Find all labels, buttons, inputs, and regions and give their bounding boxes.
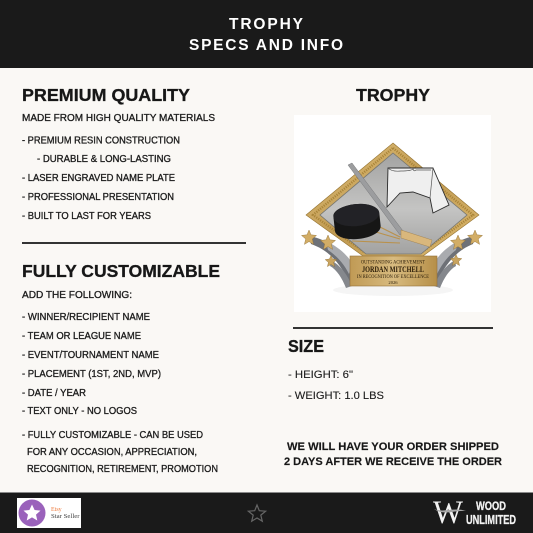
header title: TROPHY	[229, 16, 304, 33]
quality feature list	[22, 136, 180, 222]
heading: fully customizable: FULLY CUSTOMIZABLE	[22, 261, 220, 281]
shipping notice: 2 DAYS AFTER WE RECEIVE THE ORDER	[284, 456, 502, 468]
trophy base shadow	[333, 284, 453, 296]
icon: purple seal	[18, 500, 46, 526]
star seller badge: Star Seller	[51, 514, 80, 520]
shipping notice: WE WILL HAVE YOUR ORDER SHIPPED	[287, 441, 499, 453]
hockey stick	[348, 163, 432, 247]
header title: SPECS AND INFO	[189, 37, 343, 54]
logo wordmark	[466, 499, 516, 527]
customization note: FOR ANY OCCASION, APPRECIATION,	[27, 447, 197, 458]
engraved name plate: IN RECOGNITION OF EXCELLENCE	[357, 275, 429, 280]
quality feature list: - PREMIUM RESIN CONSTRUCTION	[22, 136, 180, 146]
star seller badge	[17, 498, 81, 528]
engraved name plate: JORDAN MITCHELL	[362, 265, 424, 274]
logo swoosh	[434, 509, 466, 512]
heading: premium quality: PREMIUM QUALITY	[22, 85, 190, 105]
star seller badge: Etsy	[51, 507, 62, 513]
logo monogram: W	[433, 495, 464, 531]
customization subheading: ADD THE FOLLOWING:	[22, 290, 132, 301]
customization option list	[22, 312, 161, 417]
size weight: - WEIGHT: 1.0 LBS	[288, 390, 384, 402]
customization option list: - TEAM OR LEAGUE NAME	[22, 331, 141, 342]
customization option list: - PLACEMENT (1ST, 2ND, MVP)	[22, 369, 161, 380]
engraved name plate: 2026	[388, 280, 398, 285]
customization note: RECOGNITION, RETIREMENT, PROMOTION	[27, 464, 218, 475]
logo wordmark: WOOD	[476, 499, 506, 513]
quality subheading: MADE FROM HIGH QUALITY MATERIALS	[22, 113, 215, 124]
icon: right star burst	[424, 230, 482, 288]
engraved name plate	[350, 256, 437, 286]
header title	[189, 16, 343, 54]
customization note: - FULLY CUSTOMIZABLE - CAN BE USED	[22, 430, 203, 441]
icon: left star burst	[302, 230, 362, 288]
header band	[0, 0, 533, 68]
hockey net	[387, 168, 449, 213]
icon: outline star	[248, 505, 266, 521]
panel: trophy photo	[294, 115, 491, 312]
brand logo	[433, 495, 516, 531]
panel: size	[288, 336, 384, 402]
customization option list: - WINNER/RECIPIENT NAME	[22, 312, 150, 323]
hockey puck	[332, 202, 382, 241]
quality feature list: - LASER ENGRAVED NAME PLATE	[22, 173, 175, 184]
size height: - HEIGHT: 6"	[288, 369, 353, 381]
panel: premium quality	[22, 85, 215, 222]
heading: trophy: TROPHY	[356, 85, 430, 105]
customization option list: - TEXT ONLY - NO LOGOS	[22, 406, 137, 417]
motion streaks	[352, 226, 400, 243]
customization note	[22, 430, 218, 475]
quality feature list: - BUILT TO LAST FOR YEARS	[22, 211, 151, 222]
diamond trophy body	[306, 143, 479, 256]
diamond frame	[306, 143, 479, 256]
quality feature list: - DURABLE & LONG-LASTING	[37, 154, 171, 165]
heading: size: SIZE	[288, 336, 324, 356]
quality feature list: - PROFESSIONAL PRESENTATION	[22, 192, 174, 203]
panel: fully customizable	[22, 261, 220, 475]
customization option list: - EVENT/TOURNAMENT NAME	[22, 350, 159, 361]
footer band	[0, 492, 533, 533]
diamond silver field	[320, 153, 467, 254]
customization option list: - DATE / YEAR	[22, 388, 86, 399]
shipping notice	[284, 441, 502, 468]
engraved name plate: OUTSTANDING ACHIEVEMENT	[361, 260, 425, 266]
